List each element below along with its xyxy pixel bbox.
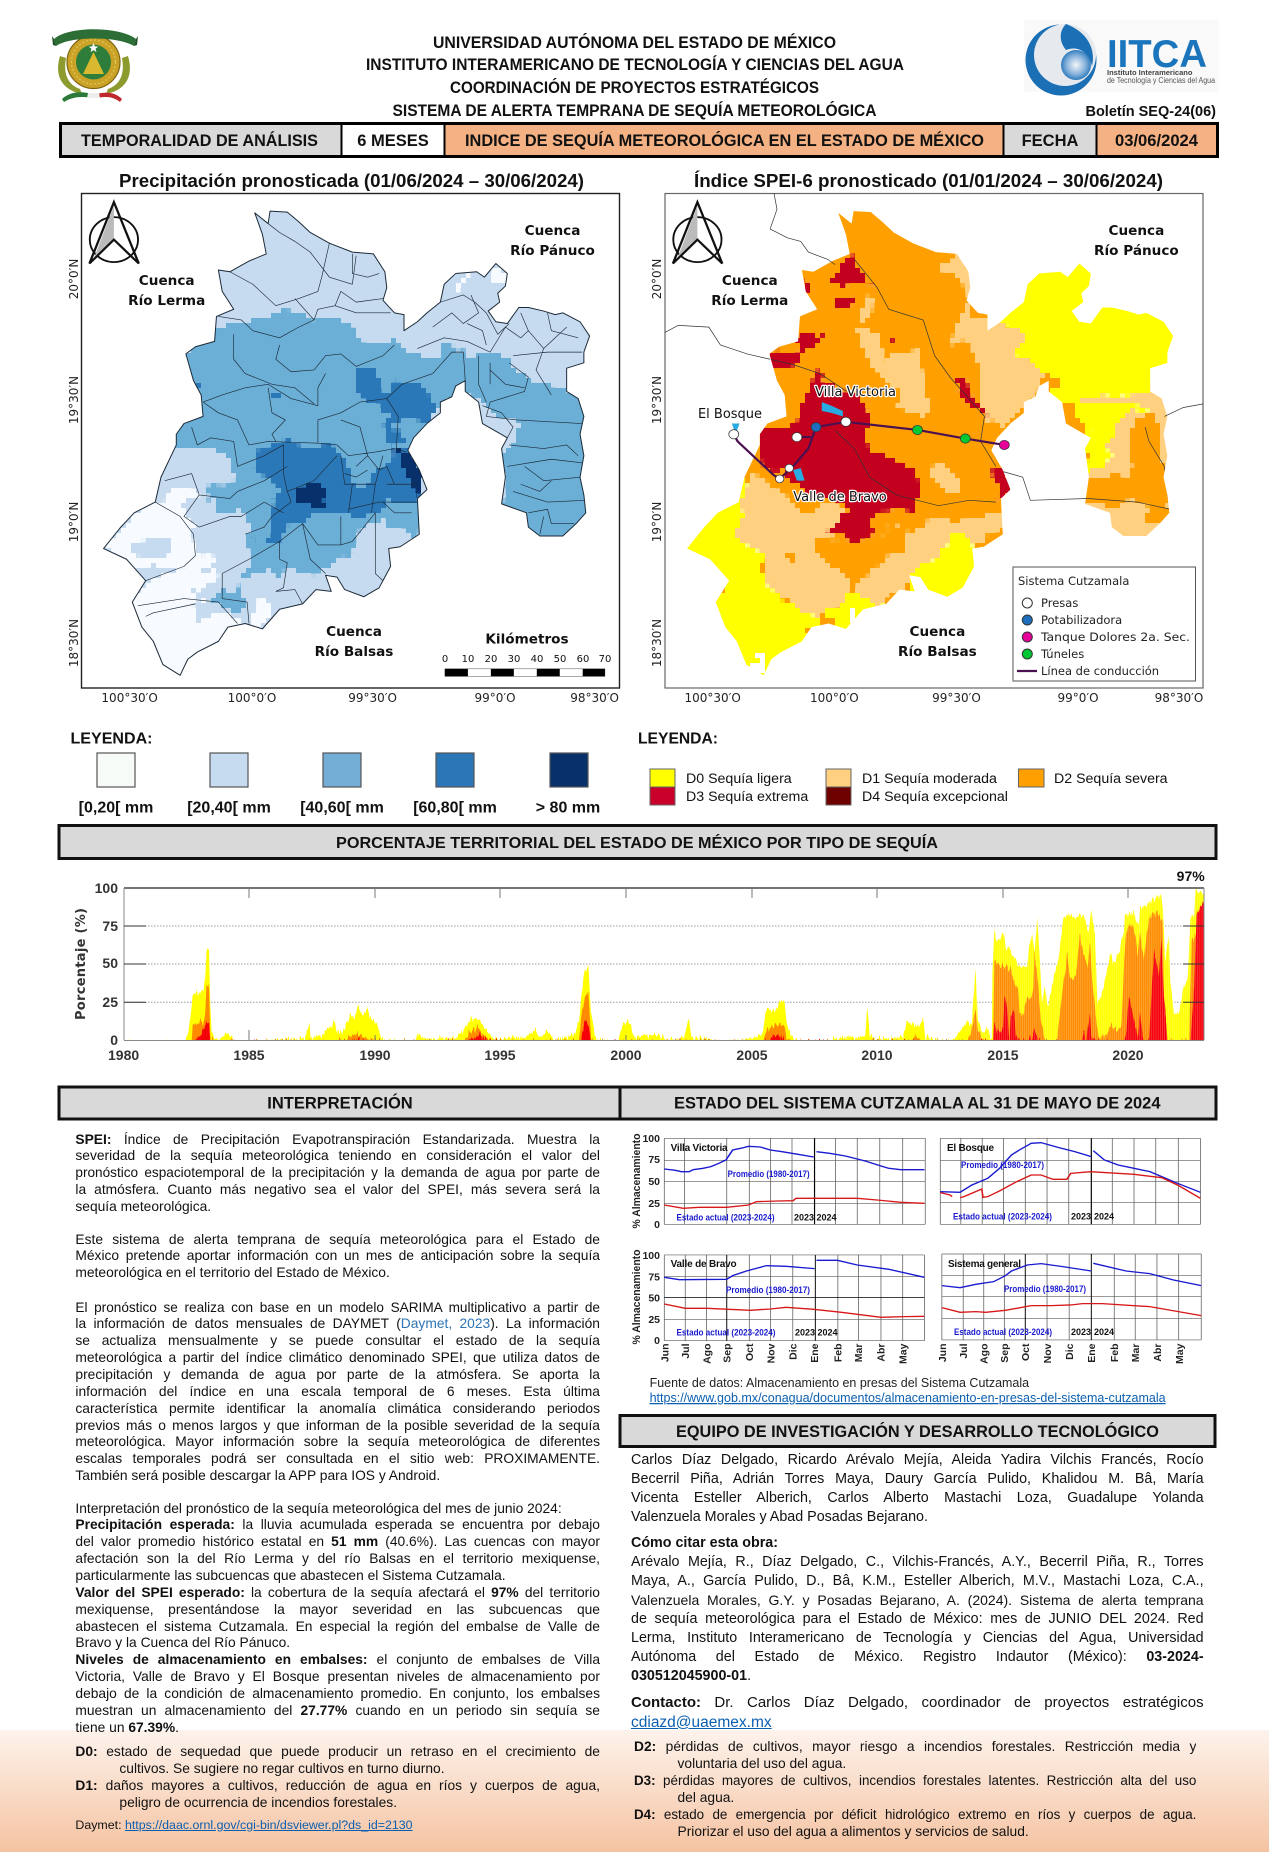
text block: June 2024 interpretation: mexiquense, presentándose la mayor severidad en las subcuencas que — [75, 1602, 600, 1617]
text block: citation: Cómo citar esta obra: — [631, 1535, 778, 1551]
text: 19°0′N — [650, 502, 664, 542]
axis labels: Sep — [999, 1344, 1011, 1363]
chart: drought percentage time series: 97% — [1177, 868, 1205, 884]
axis labels: 100 — [642, 1250, 660, 1262]
data source note: https://www.gob.mx/conagua/documentos/almacenamiento-en-presas-del-sistema-cutzamala — [650, 1391, 1166, 1405]
text block: citation: Lerma, Instituto Interamericano de Tecnología y Ciencias del Agua, Universidad — [631, 1630, 1204, 1646]
text: 30 — [508, 654, 520, 665]
axis labels: Feb — [832, 1344, 844, 1362]
logo: IITCA: de Tecnología y Ciencias del Agua — [1107, 76, 1216, 85]
chart group: Cutzamala storage — [631, 1133, 1201, 1364]
chart: Sistema general: Estado actual (2023-2024) — [954, 1327, 1052, 1338]
header title lines — [366, 33, 904, 120]
chart: Villa Victoria: 2024 — [816, 1212, 837, 1222]
text block: June 2024 interpretation: muestran un almacenamiento del 27.77% cuando en un periodo sin sequía se — [75, 1703, 600, 1718]
axis labels: Abr — [876, 1344, 888, 1362]
text: Cuenca — [722, 273, 778, 289]
logo: IITCA — [1024, 20, 1219, 96]
legend: drought classes: D0 Sequía ligera — [686, 771, 792, 787]
text: 18°30′N — [67, 619, 81, 667]
text block: forecast method: También será posible descargar la APP para IOS y Android. — [75, 1468, 440, 1483]
text: 10 — [462, 654, 474, 665]
chart: Villa Victoria: Promedio (1980-2017) — [728, 1169, 810, 1180]
heading: SPEI map: Índice SPEI-6 pronosticado (01/01/2024 – 30/06/2024) — [694, 170, 1163, 191]
text block: research team members: Valenzuela Morales y Abad Posadas Bejarano. — [631, 1508, 928, 1524]
legend: Sistema Cutzamala: Sistema Cutzamala — [1018, 574, 1129, 588]
text block: SPEI definition: SPEI: Índice de Precipitación Evapotranspiración Estandarizada. Muestra la — [75, 1132, 600, 1146]
text block: D2 to D4 definitions — [634, 1739, 1196, 1839]
text: 100°0′O — [228, 691, 276, 705]
text block: contact — [631, 1694, 1204, 1731]
text: Río Lerma — [128, 293, 205, 309]
axis labels: Jun — [937, 1344, 949, 1362]
text block: June 2024 interpretation: tiene un 67.39%. — [75, 1720, 179, 1735]
text: 20°0′N — [67, 259, 81, 299]
legend: precipitation classes: [20,40[ mm — [187, 800, 271, 816]
section heading: research team — [620, 1416, 1215, 1446]
text: El Bosque — [698, 407, 762, 422]
header info bar: 6 MESES — [357, 132, 429, 150]
text: Villa Victoria — [815, 385, 896, 400]
legend: Sistema Cutzamala: Potabilizadora — [1041, 613, 1122, 627]
legend: precipitation classes: > 80 mm — [536, 800, 600, 816]
text: 99°0′O — [1057, 691, 1099, 705]
legend: Sistema Cutzamala — [1013, 567, 1196, 681]
axis labels: Ago — [978, 1344, 990, 1364]
icon: north arrow — [673, 202, 722, 264]
legend: precipitation classes: LEYENDA: — [70, 730, 152, 748]
header title lines: SISTEMA DE ALERTA TEMPRANA DE SEQUÍA METEOROLÓGICA — [392, 101, 877, 120]
text block: SPEI definition — [75, 1132, 600, 1214]
text: 19°0′N — [67, 502, 81, 542]
chart: drought percentage time series: 25 — [102, 994, 118, 1010]
legend: drought classes: D4 Sequía excepcional — [862, 789, 1008, 805]
text block: June 2024 interpretation: del valor promedio histórico estatal en 51 mm (40.6%). Las cuencas con mayor — [75, 1534, 600, 1549]
map: forecast precipitation — [82, 194, 620, 688]
text block: forecast method: meteorológica. Mayor información sobre la sequía meteorológica de diferentes — [75, 1434, 600, 1449]
axis labels: Ene — [1086, 1343, 1098, 1363]
text block: June 2024 interpretation: Bravo y la Cuenca del Río Pánuco. — [75, 1635, 290, 1650]
text block: forecast method: precipitación y demanda de agua por parte de la atmósfera. Se aporta la — [75, 1367, 600, 1382]
chart: Sistema general: 2023 — [1071, 1327, 1091, 1337]
chart: Villa Victoria: Estado actual (2023-2024) — [676, 1212, 774, 1224]
text block: D0 and D1 definitions: D0: estado de sequedad que puede producir un retraso en el crecimiento de — [75, 1744, 600, 1759]
axis labels: Ago — [702, 1344, 714, 1364]
chart: Sistema general — [942, 1254, 1201, 1340]
text block: research team members — [631, 1452, 1204, 1524]
chart: El Bosque: Promedio (1980-2017) — [961, 1160, 1044, 1171]
legend: drought classes: D3 Sequía extrema — [686, 789, 808, 805]
header info bar: 03/06/2024 — [1115, 132, 1199, 150]
logo: UAEM coat of arms — [52, 29, 138, 102]
chart: drought percentage time series: 2015 — [987, 1047, 1019, 1063]
header info bar — [60, 124, 1218, 156]
axis labels: Jun — [660, 1344, 672, 1362]
text: Río Balsas — [315, 644, 393, 660]
axis labels: 25 — [648, 1314, 660, 1326]
header info bar: TEMPORALIDAD DE ANÁLISIS — [81, 131, 318, 150]
chart: Sistema general: 2024 — [1094, 1327, 1114, 1337]
chart: drought percentage time series — [74, 868, 1205, 1063]
chart: Sistema general: Sistema general — [948, 1259, 1021, 1270]
text block: D0 and D1 definitions: D1: daños mayores a cultivos, reducción de agua en ríos y cuerpos de agua, — [75, 1778, 600, 1793]
text block: D2 to D4 definitions: D2: pérdidas de cultivos, mayor riesgo a incendios forestales. Restricción media y — [634, 1739, 1196, 1754]
axis labels — [631, 1133, 1186, 1364]
axis labels: Jul — [958, 1343, 970, 1359]
text block: June 2024 interpretation: Victoria, Valle de Bravo y El Bosque presentan niveles de almacenamiento por — [75, 1669, 600, 1684]
text block: June 2024 interpretation: debajo de la condición de almacenamiento promedio. En conjunto, los embalses — [75, 1686, 600, 1701]
chart: drought percentage time series: 50 — [102, 955, 118, 971]
text: Kilómetros — [485, 632, 569, 648]
text: 50 — [554, 654, 566, 665]
data source note: Fuente de datos: Almacenamiento en presas del Sistema Cutzamala — [650, 1376, 1029, 1390]
chart: El Bosque: El Bosque — [947, 1143, 994, 1154]
chart: Valle de Bravo: Valle de Bravo — [671, 1259, 737, 1270]
chart: drought percentage time series: 1995 — [484, 1047, 516, 1063]
text block: research team members: Carlos Díaz Delgado, Ricardo Arévalo Mejía, Aleida Yadira Vilchis Francés, Rocío — [631, 1452, 1204, 1468]
chart: drought percentage time series: 2000 — [610, 1047, 642, 1063]
legend: Sistema Cutzamala: Tanque Dolores 2a. Sec. — [1040, 630, 1190, 644]
axis labels: Sep — [722, 1344, 734, 1363]
text block: citation: de sequía meteorológica para el Estado de México: mes de JUNIO DEL 2024. Red — [631, 1611, 1204, 1627]
data source note — [650, 1376, 1166, 1405]
axis labels: 0 — [654, 1219, 660, 1231]
text: 18°30′N — [650, 619, 664, 667]
header info bar: INDICE DE SEQUÍA METEOROLÓGICA EN EL ESTADO DE MÉXICO — [465, 131, 984, 150]
text: Valle de Bravo — [793, 490, 887, 505]
icon: north arrow — [89, 202, 139, 264]
scale bar — [445, 669, 605, 676]
text block: June 2024 interpretation — [75, 1500, 600, 1735]
text block: D0 and D1 definitions: cultivos. Se sugiere no regar cultivos en turno diurno. — [119, 1761, 445, 1776]
text block: SPEI definition: pronóstico espaciotemporal de la precipitación y la demanda de agua por parte de — [75, 1165, 600, 1180]
text: 60 — [577, 654, 589, 665]
text block: June 2024 interpretation: Interpretación del pronóstico de la sequía meteorológica del mes de junio 2024: — [75, 1500, 562, 1516]
axis labels: 0 — [654, 1335, 660, 1347]
legend: precipitation classes — [70, 730, 600, 816]
text: 70 — [599, 654, 611, 665]
text: Cuenca — [1109, 223, 1164, 239]
footer gradient band — [0, 1730, 1269, 1852]
chart: Valle de Bravo: 2023 — [795, 1328, 815, 1338]
text: 0 — [442, 654, 448, 665]
text block: D0 and D1 definitions — [75, 1744, 600, 1810]
axis labels: Ene — [809, 1343, 821, 1363]
text block: June 2024 interpretation: Precipitación esperada: la lluvia acumulada esperada se encuentra por debajo — [75, 1517, 600, 1532]
section heading: interpretation: INTERPRETACIÓN — [267, 1094, 413, 1112]
legend: precipitation classes: [60,80[ mm — [413, 800, 497, 816]
legend: drought classes — [638, 730, 1168, 805]
text block: forecast method: meteorológica a partir del índice climático denominado SPEI, que utiliza datos de — [75, 1350, 600, 1365]
chart: Valle de Bravo — [664, 1255, 924, 1341]
text block: forecast method: información del índice en una escala temporal de 6 meses. Esta última — [75, 1384, 600, 1399]
text: Cuenca — [326, 624, 382, 640]
axis labels: Mar — [853, 1344, 865, 1362]
text: 19°30′N — [650, 376, 664, 424]
text: 100°30′O — [101, 691, 158, 705]
axis labels: % Almacenamiento — [631, 1133, 643, 1228]
axis labels: Dic — [1064, 1343, 1076, 1360]
text block: system purpose: Este sistema de alerta temprana de sequía meteorológica para el Estado de — [75, 1232, 600, 1246]
chart: Valle de Bravo: Promedio (1980-2017) — [726, 1285, 810, 1296]
legend: Sistema Cutzamala: Línea de conducción — [1041, 664, 1159, 678]
text block: forecast method — [75, 1300, 600, 1483]
section heading: interpretation — [59, 1087, 620, 1119]
legend: precipitation classes: [0,20[ mm — [79, 800, 153, 816]
header title lines: INSTITUTO INTERAMERICANO DE TECNOLOGÍA Y CIENCIAS DEL AGUA — [366, 55, 904, 74]
legend: drought classes: LEYENDA: — [638, 730, 718, 748]
text block: research team members: Becerril Piña, Adrián Torres Maya, Daury García Pulido, Khalidou M. Bâ, María — [631, 1470, 1204, 1486]
Cutzamala conduction line and reservoirs — [729, 402, 1009, 483]
text block: D2 to D4 definitions: Priorizar el uso del agua a alimentos y servicios de salud. — [678, 1824, 1029, 1839]
text: Río Pánuco — [1094, 243, 1179, 259]
text block: citation: Valenzuela Morales, G.Y. y Posadas Bejarano, A. (2024). Sistema de alerta temprana — [631, 1592, 1204, 1608]
chart: Villa Victoria — [664, 1138, 925, 1224]
text: 100°30′O — [685, 691, 741, 705]
text block: June 2024 interpretation: Valor del SPEI esperado: la cobertura de la sequía afectará el 97% del territorio — [75, 1585, 600, 1600]
heading: precipitation map: Precipitación pronosticada (01/06/2024 – 30/06/2024) — [119, 170, 584, 191]
chart: drought percentage time series: 1980 — [108, 1047, 139, 1063]
axis labels: 100 — [642, 1133, 660, 1145]
text block: June 2024 interpretation: particularmente las subcuencas que abastecen el Sistema Cutzamala. — [75, 1568, 506, 1583]
text block: forecast method: la información de datos mensuales de DAYMET (Daymet, 2023). La información — [75, 1316, 600, 1331]
chart: Sistema general: Promedio (1980-2017) — [1004, 1284, 1086, 1295]
axis labels: 50 — [648, 1176, 660, 1188]
text block: system purpose — [75, 1232, 600, 1280]
axis labels: Nov — [1042, 1343, 1054, 1363]
text: Río Pánuco — [510, 243, 595, 259]
text block: D2 to D4 definitions: D3: pérdidas mayores de cultivos, incendios forestales latentes. Restricción alta del uso — [634, 1773, 1196, 1788]
text block: SPEI definition: severidad de la sequía meteorológica teniendo en consideración el valor del — [75, 1148, 600, 1163]
text block: forecast method: escalas temporales podrá ser consultada en el sitio web: PROXIMAMENTE. — [75, 1451, 600, 1466]
text block: D2 to D4 definitions: del agua. — [678, 1790, 734, 1805]
text: 20 — [485, 654, 497, 665]
bulletin number: Boletín SEQ-24(06) — [1085, 104, 1216, 120]
text block: forecast method: previos más o menos largos y que informan de la posible severidad de la sequía — [75, 1418, 600, 1433]
chart: drought percentage time series: 0 — [110, 1032, 118, 1048]
axis labels: 25 — [648, 1198, 660, 1210]
text block: citation: Maya, A., García Pulido, D., Bâ, K.M., Esteller Alberich, M.V., Mastachi Loza, C.A., — [631, 1573, 1204, 1589]
text block: forecast method: característica permite identificar la anomalía climática considerando periodos — [75, 1401, 600, 1416]
chart: drought percentage time series: 2010 — [861, 1047, 893, 1063]
axis labels: Jul — [680, 1343, 692, 1359]
text: Cuenca — [910, 624, 965, 640]
text block: SPEI definition: sequía meteorológica. — [75, 1199, 211, 1214]
legend: precipitation classes: [40,60[ mm — [300, 800, 384, 816]
chart: Valle de Bravo: Estado actual (2023-2024) — [676, 1328, 776, 1338]
axis labels: Oct — [744, 1343, 756, 1361]
axis labels: Oct — [1020, 1343, 1032, 1361]
chart: El Bosque: 2024 — [1094, 1212, 1114, 1222]
axis labels: Abr — [1152, 1344, 1164, 1362]
text block: citation: 030512045900-01. — [631, 1668, 751, 1684]
text: 40 — [531, 654, 543, 665]
text: Río Balsas — [898, 644, 977, 660]
text block: system purpose: México pretende aportar información con un mes de anticipación sobre la sequía — [75, 1248, 600, 1263]
text: 20°0′N — [650, 259, 664, 299]
axis labels: % Almacenamiento — [631, 1249, 643, 1344]
text block: citation: Arévalo Mejía, R., Díaz Delgado, C., Vilchis-Francés, A.Y., Becerril Piña, R., Torres — [631, 1554, 1204, 1570]
chart: El Bosque: Estado actual (2023-2024) — [953, 1212, 1052, 1222]
axis labels: Nov — [766, 1343, 778, 1363]
text block: contact: cdiazd@uaemex.mx — [631, 1714, 772, 1731]
chart: drought percentage time series: 75 — [102, 918, 118, 934]
text: Cuenca — [525, 223, 580, 239]
chart: drought percentage time series: 1985 — [233, 1047, 265, 1063]
logo: IITCA: IITCA — [1107, 33, 1207, 76]
axis labels: Mar — [1130, 1344, 1142, 1362]
section heading: territorial percentage — [59, 826, 1216, 858]
legend: Sistema Cutzamala: Presas — [1041, 596, 1078, 610]
axis labels: May — [1174, 1343, 1186, 1364]
text block: research team members: Vicenta Esteller Alberich, Carlos Alberto Mastachi Loza, Guadalupe Yolanda — [631, 1490, 1204, 1506]
header title lines: COORDINACIÓN DE PROYECTOS ESTRATÉGICOS — [450, 78, 819, 97]
chart: El Bosque: 2023 — [1071, 1212, 1091, 1222]
chart: drought percentage time series: 100 — [95, 880, 118, 896]
map: SPEI-6 forecast — [665, 193, 1203, 688]
header title lines: UNIVERSIDAD AUTÓNOMA DEL ESTADO DE MÉXICO — [433, 33, 836, 52]
section heading: Cutzamala status — [620, 1087, 1216, 1119]
text: 98°30′O — [1155, 691, 1203, 705]
chart: Villa Victoria: 2023 — [794, 1212, 814, 1222]
text block: D2 to D4 definitions: voluntaria del uso del agua. — [678, 1756, 846, 1771]
text: Cuenca — [139, 273, 195, 289]
chart: drought percentage time series: 1990 — [359, 1047, 391, 1063]
text block: contact: Contacto: Dr. Carlos Díaz Delgado, coordinador de proyectos estratégicos — [631, 1694, 1204, 1711]
text: Río Lerma — [711, 293, 788, 309]
text block: citation: Autónoma del Estado de México. Registro Indautor (México): 03-2024- — [631, 1649, 1204, 1665]
text: 99°30′O — [348, 691, 397, 705]
chart: Villa Victoria: Villa Victoria — [671, 1143, 728, 1154]
section heading: Cutzamala status: ESTADO DEL SISTEMA CUTZAMALA AL 31 DE MAYO DE 2024 — [674, 1094, 1161, 1112]
chart: El Bosque — [940, 1138, 1200, 1224]
header info bar: FECHA — [1022, 132, 1078, 150]
text block: citation — [631, 1535, 1204, 1684]
text block: June 2024 interpretation: abastecen el sistema Cutzamala. En especial la región del embalse de Valle de — [75, 1619, 600, 1634]
text: 100°0′O — [810, 691, 859, 705]
legend: drought classes: D2 Sequía severa — [1054, 771, 1168, 787]
axis labels: Feb — [1109, 1344, 1121, 1362]
text: 99°0′O — [474, 691, 516, 705]
legend: drought classes: D1 Sequía moderada — [862, 771, 997, 787]
axis labels: 50 — [648, 1292, 660, 1304]
section heading: territorial percentage: PORCENTAJE TERRITORIAL DEL ESTADO DE MÉXICO POR TIPO DE SEQUÍA — [336, 833, 938, 852]
text block: forecast method: se actualiza mensualmente y se puede consultar el estado de la sequía — [75, 1333, 600, 1348]
axis labels: 75 — [648, 1154, 660, 1166]
reference: Daymet link: Daymet: https://daac.ornl.gov/cgi-bin/dsviewer.pl?ds_id=2130 — [75, 1818, 413, 1832]
text block: June 2024 interpretation: Niveles de almacenamiento en embalses: el conjunto de embalses de Villa — [75, 1652, 600, 1667]
legend: Sistema Cutzamala: Túneles — [1040, 647, 1084, 661]
section heading: research team: EQUIPO DE INVESTIGACIÓN Y DESARROLLO TECNOLÓGICO — [676, 1422, 1159, 1441]
text block: SPEI definition: la atmósfera. Cuanto más negativo sea el valor del SPEI, más severa será la — [75, 1182, 600, 1197]
text: 99°30′O — [932, 691, 981, 705]
text block: forecast method: El pronóstico se realiza con base en un modelo SARIMA multiplicativo a partir de — [75, 1300, 600, 1314]
chart: Valle de Bravo: 2024 — [818, 1328, 838, 1338]
chart: drought percentage time series: 2020 — [1112, 1047, 1144, 1063]
text block: D0 and D1 definitions: peligro de ocurrencia de incendios forestales. — [119, 1795, 397, 1810]
text: 98°30′O — [570, 691, 619, 705]
chart: drought percentage time series: Porcentaje (%) — [74, 908, 89, 1020]
text block: D2 to D4 definitions: D4: estado de emergencia por déficit hidrológico extremo en ríos y cuerpos de agua. — [634, 1807, 1196, 1822]
logo: IITCA: Instituto Interamericano — [1107, 68, 1193, 77]
axis labels: 75 — [648, 1272, 660, 1284]
text: 19°30′N — [67, 376, 81, 424]
text block: June 2024 interpretation: afectación son la del Río Lerma y del río Balsas en el territorio mexiquense, — [75, 1551, 600, 1566]
text block: system purpose: meteorológica en el territorio del Estado de México. — [75, 1265, 390, 1280]
chart: drought percentage time series: 2005 — [736, 1047, 768, 1063]
axis labels: Dic — [788, 1343, 800, 1360]
axis labels: May — [898, 1343, 910, 1364]
